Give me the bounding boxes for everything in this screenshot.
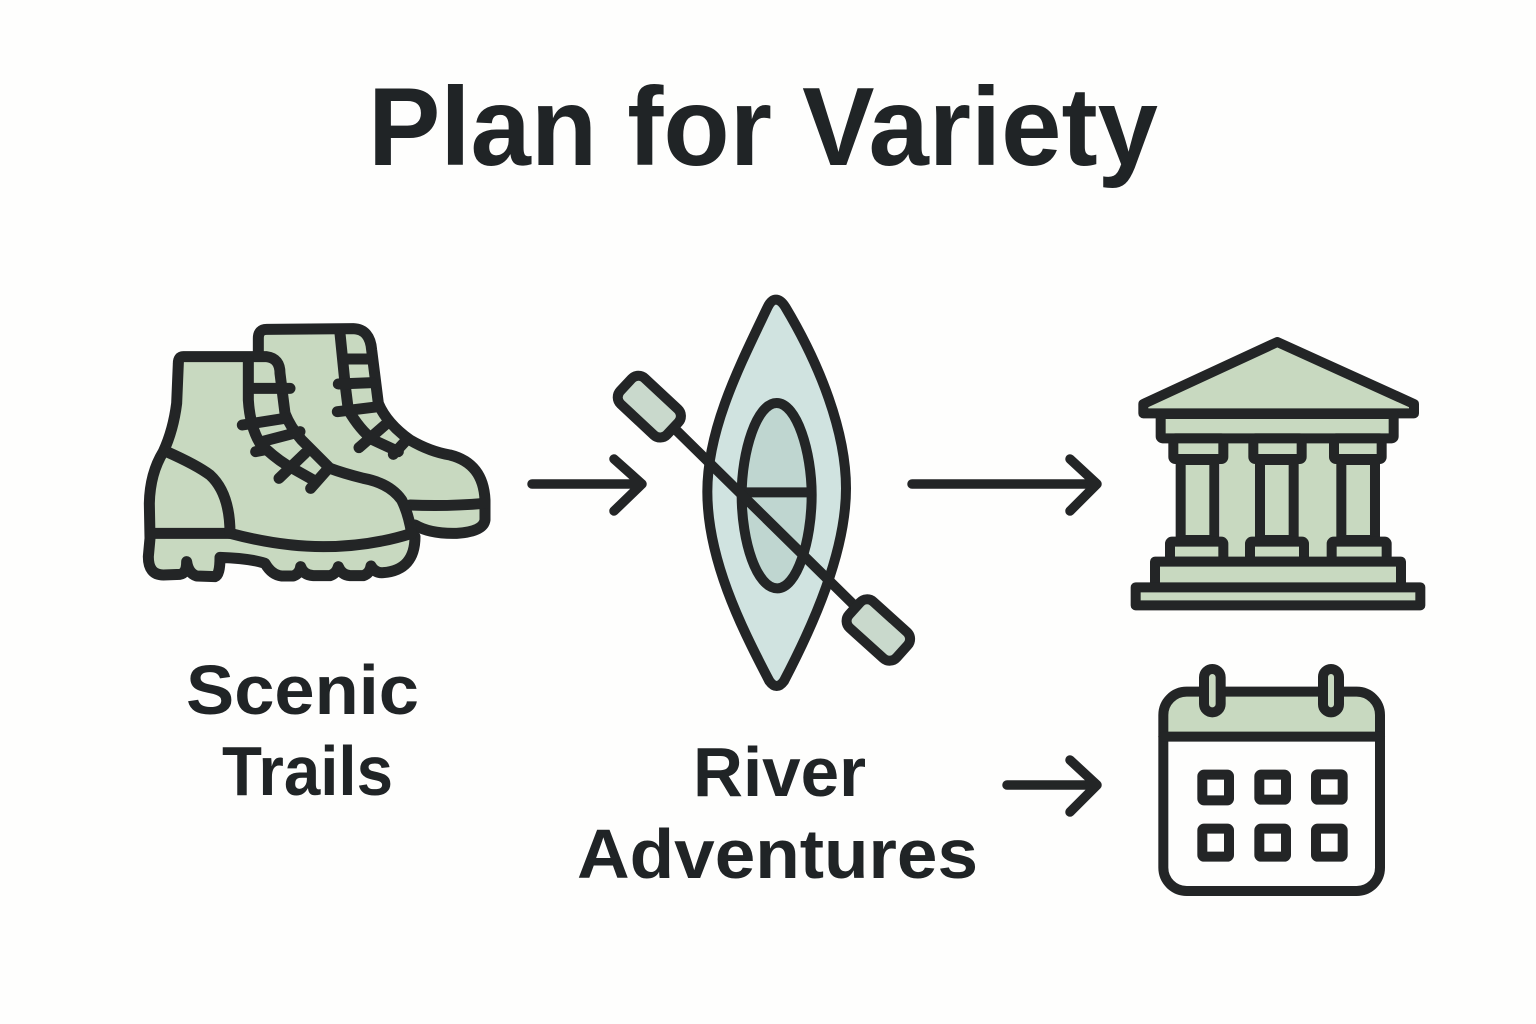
back boot bbox=[258, 329, 485, 533]
icon: kayak and paddle bbox=[614, 300, 914, 686]
icon: museum building bbox=[1136, 342, 1420, 605]
arrow: trails to river bbox=[532, 459, 642, 511]
label: river adventures bbox=[577, 733, 978, 893]
label: river adventures: Adventures bbox=[577, 815, 978, 893]
cockpit bbox=[742, 403, 812, 588]
label: scenic trails: Scenic bbox=[186, 651, 419, 729]
arrow: river to museum bbox=[912, 459, 1097, 511]
label: scenic trails: Trails bbox=[222, 732, 393, 810]
kayak hull bbox=[707, 300, 846, 686]
front boot bbox=[148, 357, 415, 577]
paddle blade bbox=[843, 595, 914, 665]
icon: calendar bbox=[1163, 669, 1380, 891]
label: scenic trails bbox=[186, 651, 419, 810]
title: Plan for Variety bbox=[368, 65, 1158, 189]
paddle shaft bbox=[675, 429, 857, 608]
paddle blade bbox=[614, 372, 685, 441]
arrow: river to calendar bbox=[1007, 760, 1097, 812]
icon: hiking boots bbox=[148, 329, 485, 577]
label: river adventures: River bbox=[693, 733, 866, 811]
